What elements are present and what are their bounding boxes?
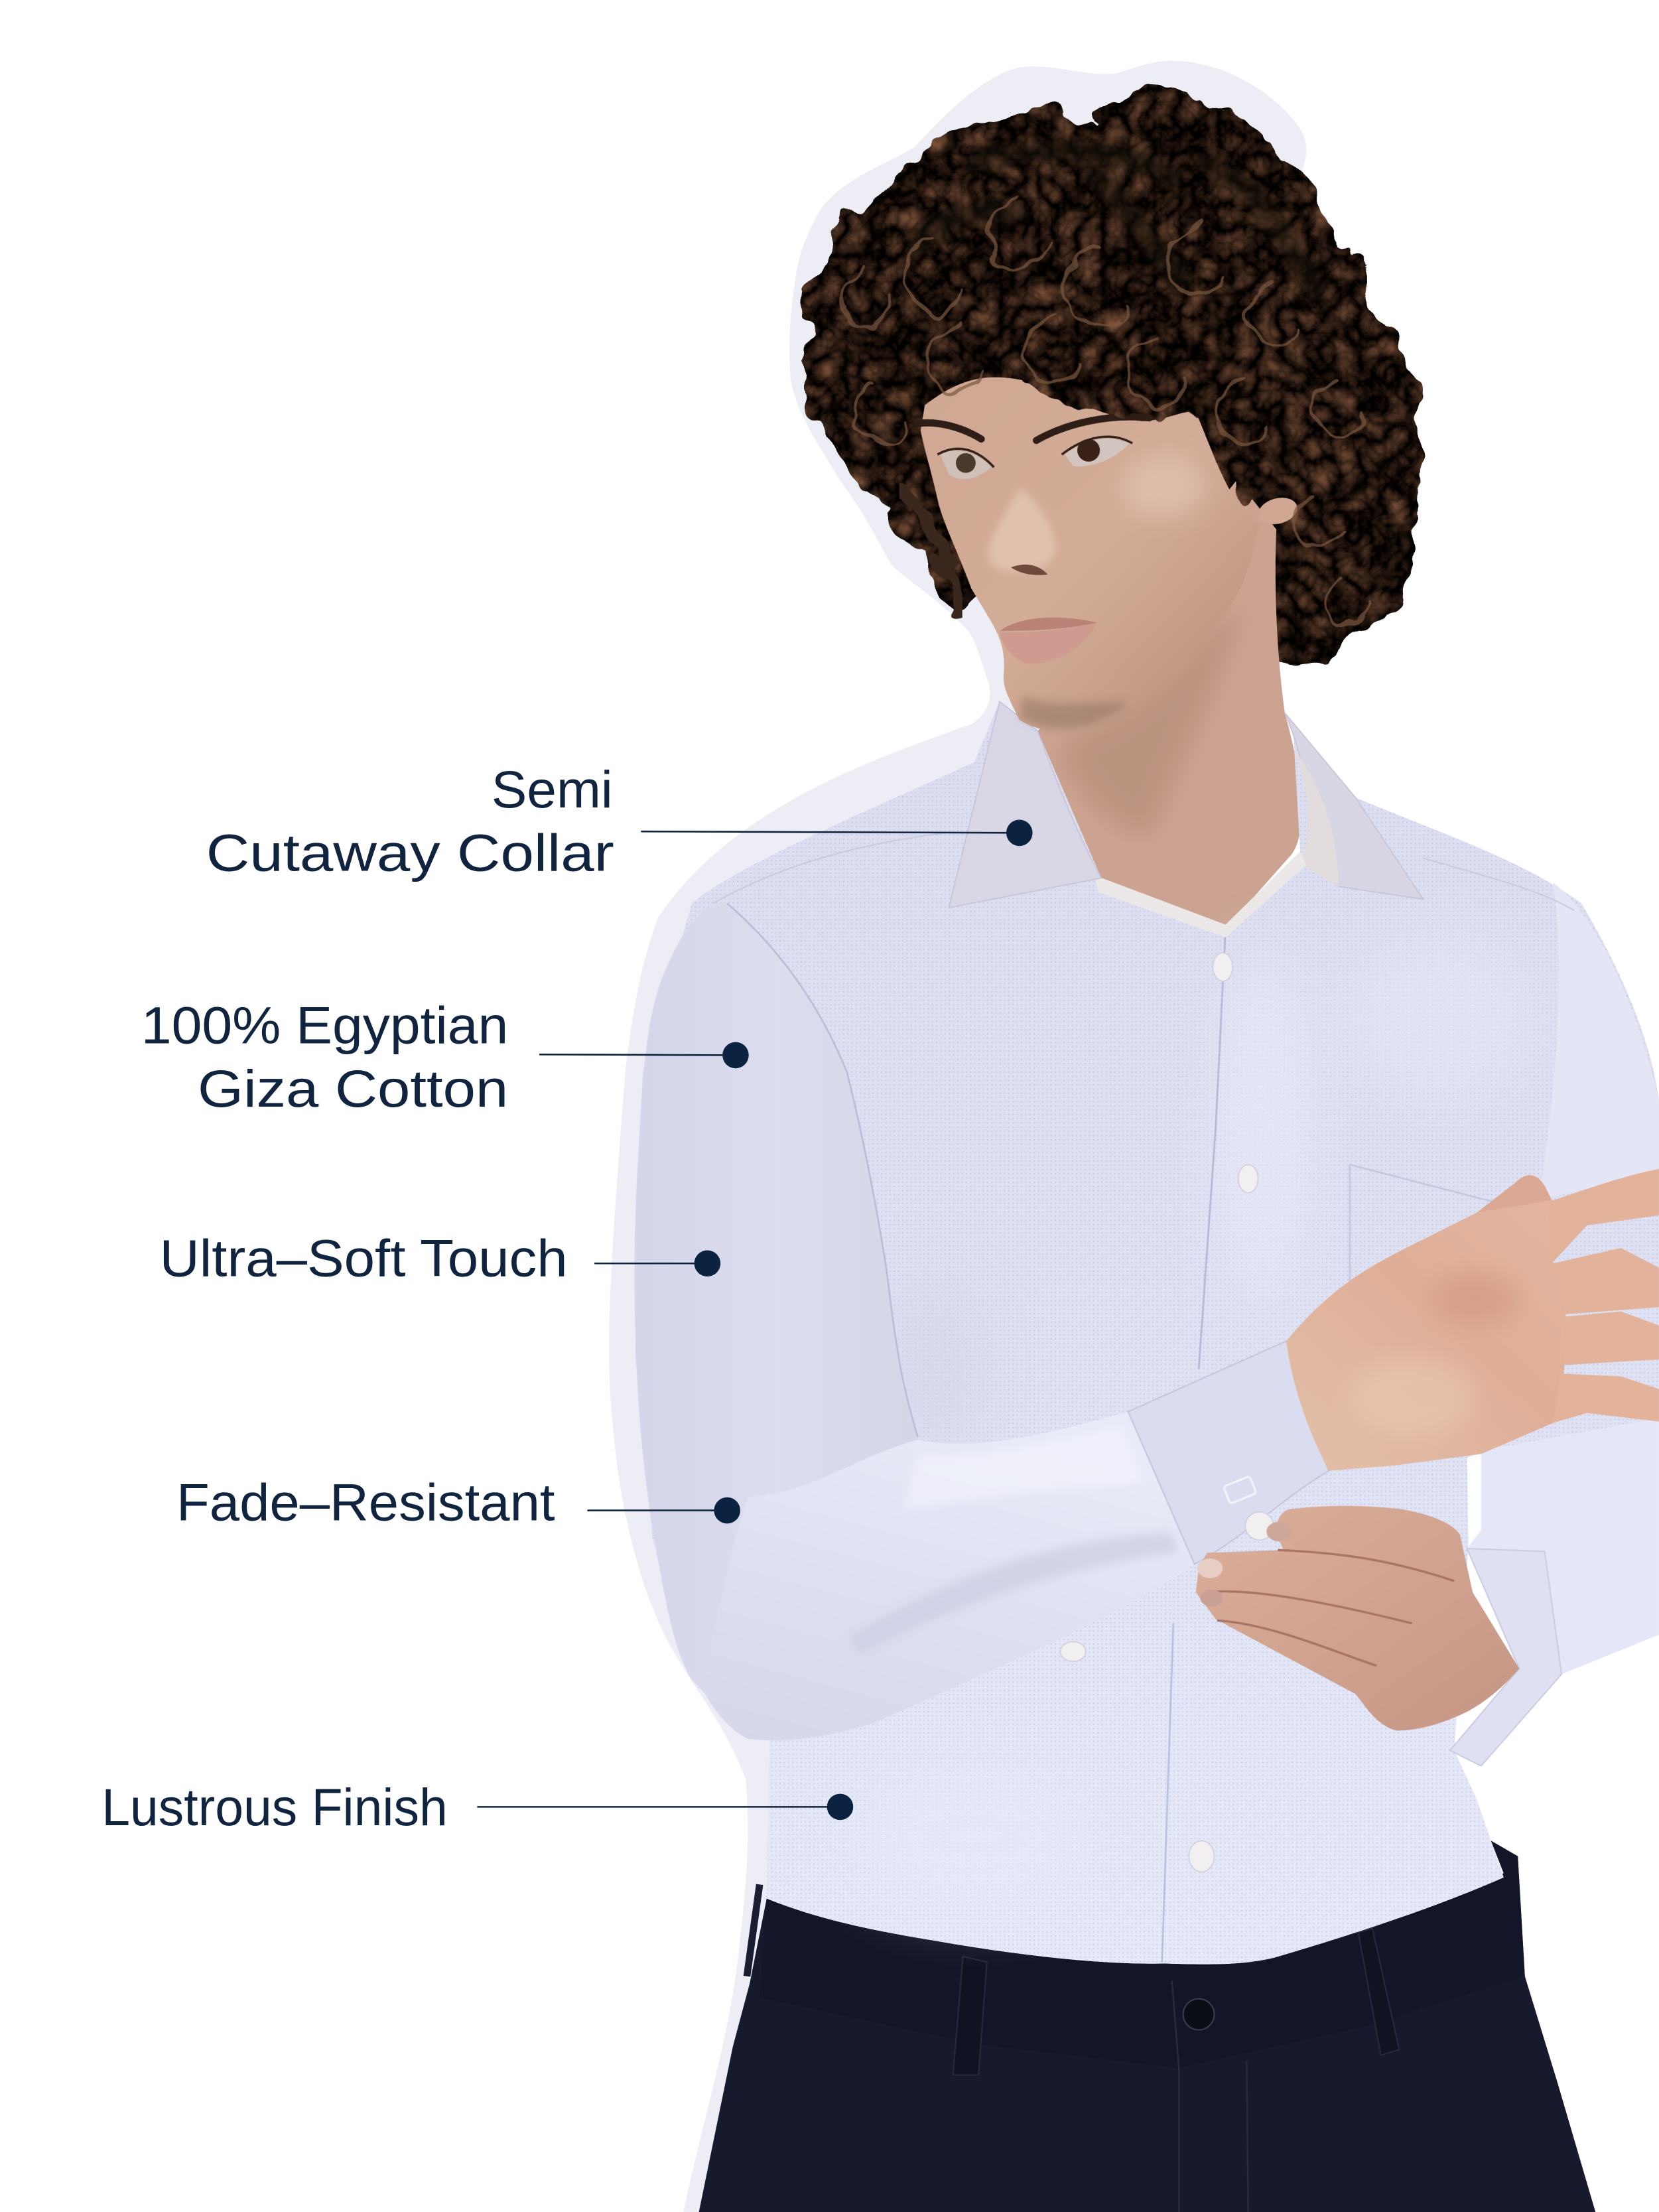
stubble [1020,696,1130,728]
face shape [921,378,1260,731]
right cuff [1450,1549,1561,1766]
right sleeve highlight [1539,882,1659,1200]
hand shape [1196,1506,1519,1730]
model figure [634,90,1659,2212]
shoulder yoke seam [713,833,1574,910]
waistband [760,1840,1525,2068]
neck [1037,480,1301,929]
brown curl strands [844,198,1367,624]
sleeve fold upper [903,1426,1144,1511]
dot [827,1794,853,1820]
pocket outline [1350,1164,1496,1306]
placket seam lower [1162,1624,1173,1962]
lower hand [1196,1506,1519,1730]
waist button [1183,1999,1215,2030]
shirt buttons [1061,953,1274,1872]
hair fringe and curls [844,150,1367,624]
middle finger [1553,1248,1659,1314]
callout: Egyptian Giza cotton [141,996,749,1118]
torso highlights [847,932,1539,1905]
leader line [539,1054,736,1055]
neck shadow [1059,607,1242,833]
face [918,378,1300,731]
dark hair shadows [918,150,1313,289]
dot [722,1042,749,1068]
label line two: Cutaway Collar [206,824,614,882]
curls on left cheek [903,487,958,611]
leader line [477,1806,840,1807]
fly seam [1172,1980,1248,2212]
collar underside [1294,748,1339,886]
lips [1000,618,1097,663]
dot [714,1497,740,1523]
left collar [949,701,1101,908]
fringe mass [911,226,1282,502]
pants body [699,1840,1595,2212]
nose [988,487,1056,571]
index finger [1546,1169,1659,1262]
label: Lustrous Finish [101,1778,448,1836]
finger nails [1197,1522,1292,1606]
label: Ultra–Soft Touch [160,1229,568,1287]
leader line [587,1510,727,1511]
label: Fade–Resistant [176,1473,555,1531]
nostril [1011,565,1047,575]
dot [1006,820,1033,846]
hair back mass [798,90,1425,666]
inner collar band [1095,851,1306,937]
belt loop left side [747,1884,760,1976]
belt loop left [953,1957,987,2075]
pants [699,1840,1595,2212]
left eye [937,449,994,479]
label: 100% Egyptian [141,996,508,1054]
belt loop right [1359,1928,1399,2055]
left eyebrow [918,423,981,439]
leader line [641,831,1020,833]
right eye [1062,437,1132,466]
wrist highlight [1349,1358,1475,1437]
placket seam upper [1199,929,1226,1369]
label line two: Giza Cotton [198,1060,508,1118]
sleeve seam [727,904,918,1437]
ear [1256,494,1300,528]
shirt torso [635,701,1659,1965]
shirt weave [635,701,1659,1965]
background halo behind figure [609,60,1306,2212]
back of hand [1286,1200,1587,1471]
sleeve fold shadow [847,1531,1179,1655]
shirt [634,701,1659,1965]
thumb [1477,1175,1553,1242]
upper hand [1286,1169,1659,1471]
callout: ultra-soft touch [160,1229,720,1287]
finger creases [1207,1550,1454,1666]
left cuff [1128,1341,1329,1564]
right eyebrow [1036,417,1150,441]
callout: lustrous finish [101,1778,853,1836]
little finger [1553,1373,1659,1423]
ring finger [1560,1312,1659,1365]
sleeve forearm right [1467,1418,1659,1674]
right collar [1285,713,1424,899]
cuff button hole [1223,1476,1256,1503]
callout: fade-resistant [176,1473,740,1531]
left sleeve forearm [699,1412,1195,1740]
knuckle flush [1433,1273,1518,1324]
label: Semi [492,760,613,819]
leader line [594,1263,707,1264]
callout: semi cutaway collar [206,760,1033,882]
left sleeve [634,904,918,1739]
dot [695,1250,720,1277]
forehead highlight [1122,456,1207,518]
